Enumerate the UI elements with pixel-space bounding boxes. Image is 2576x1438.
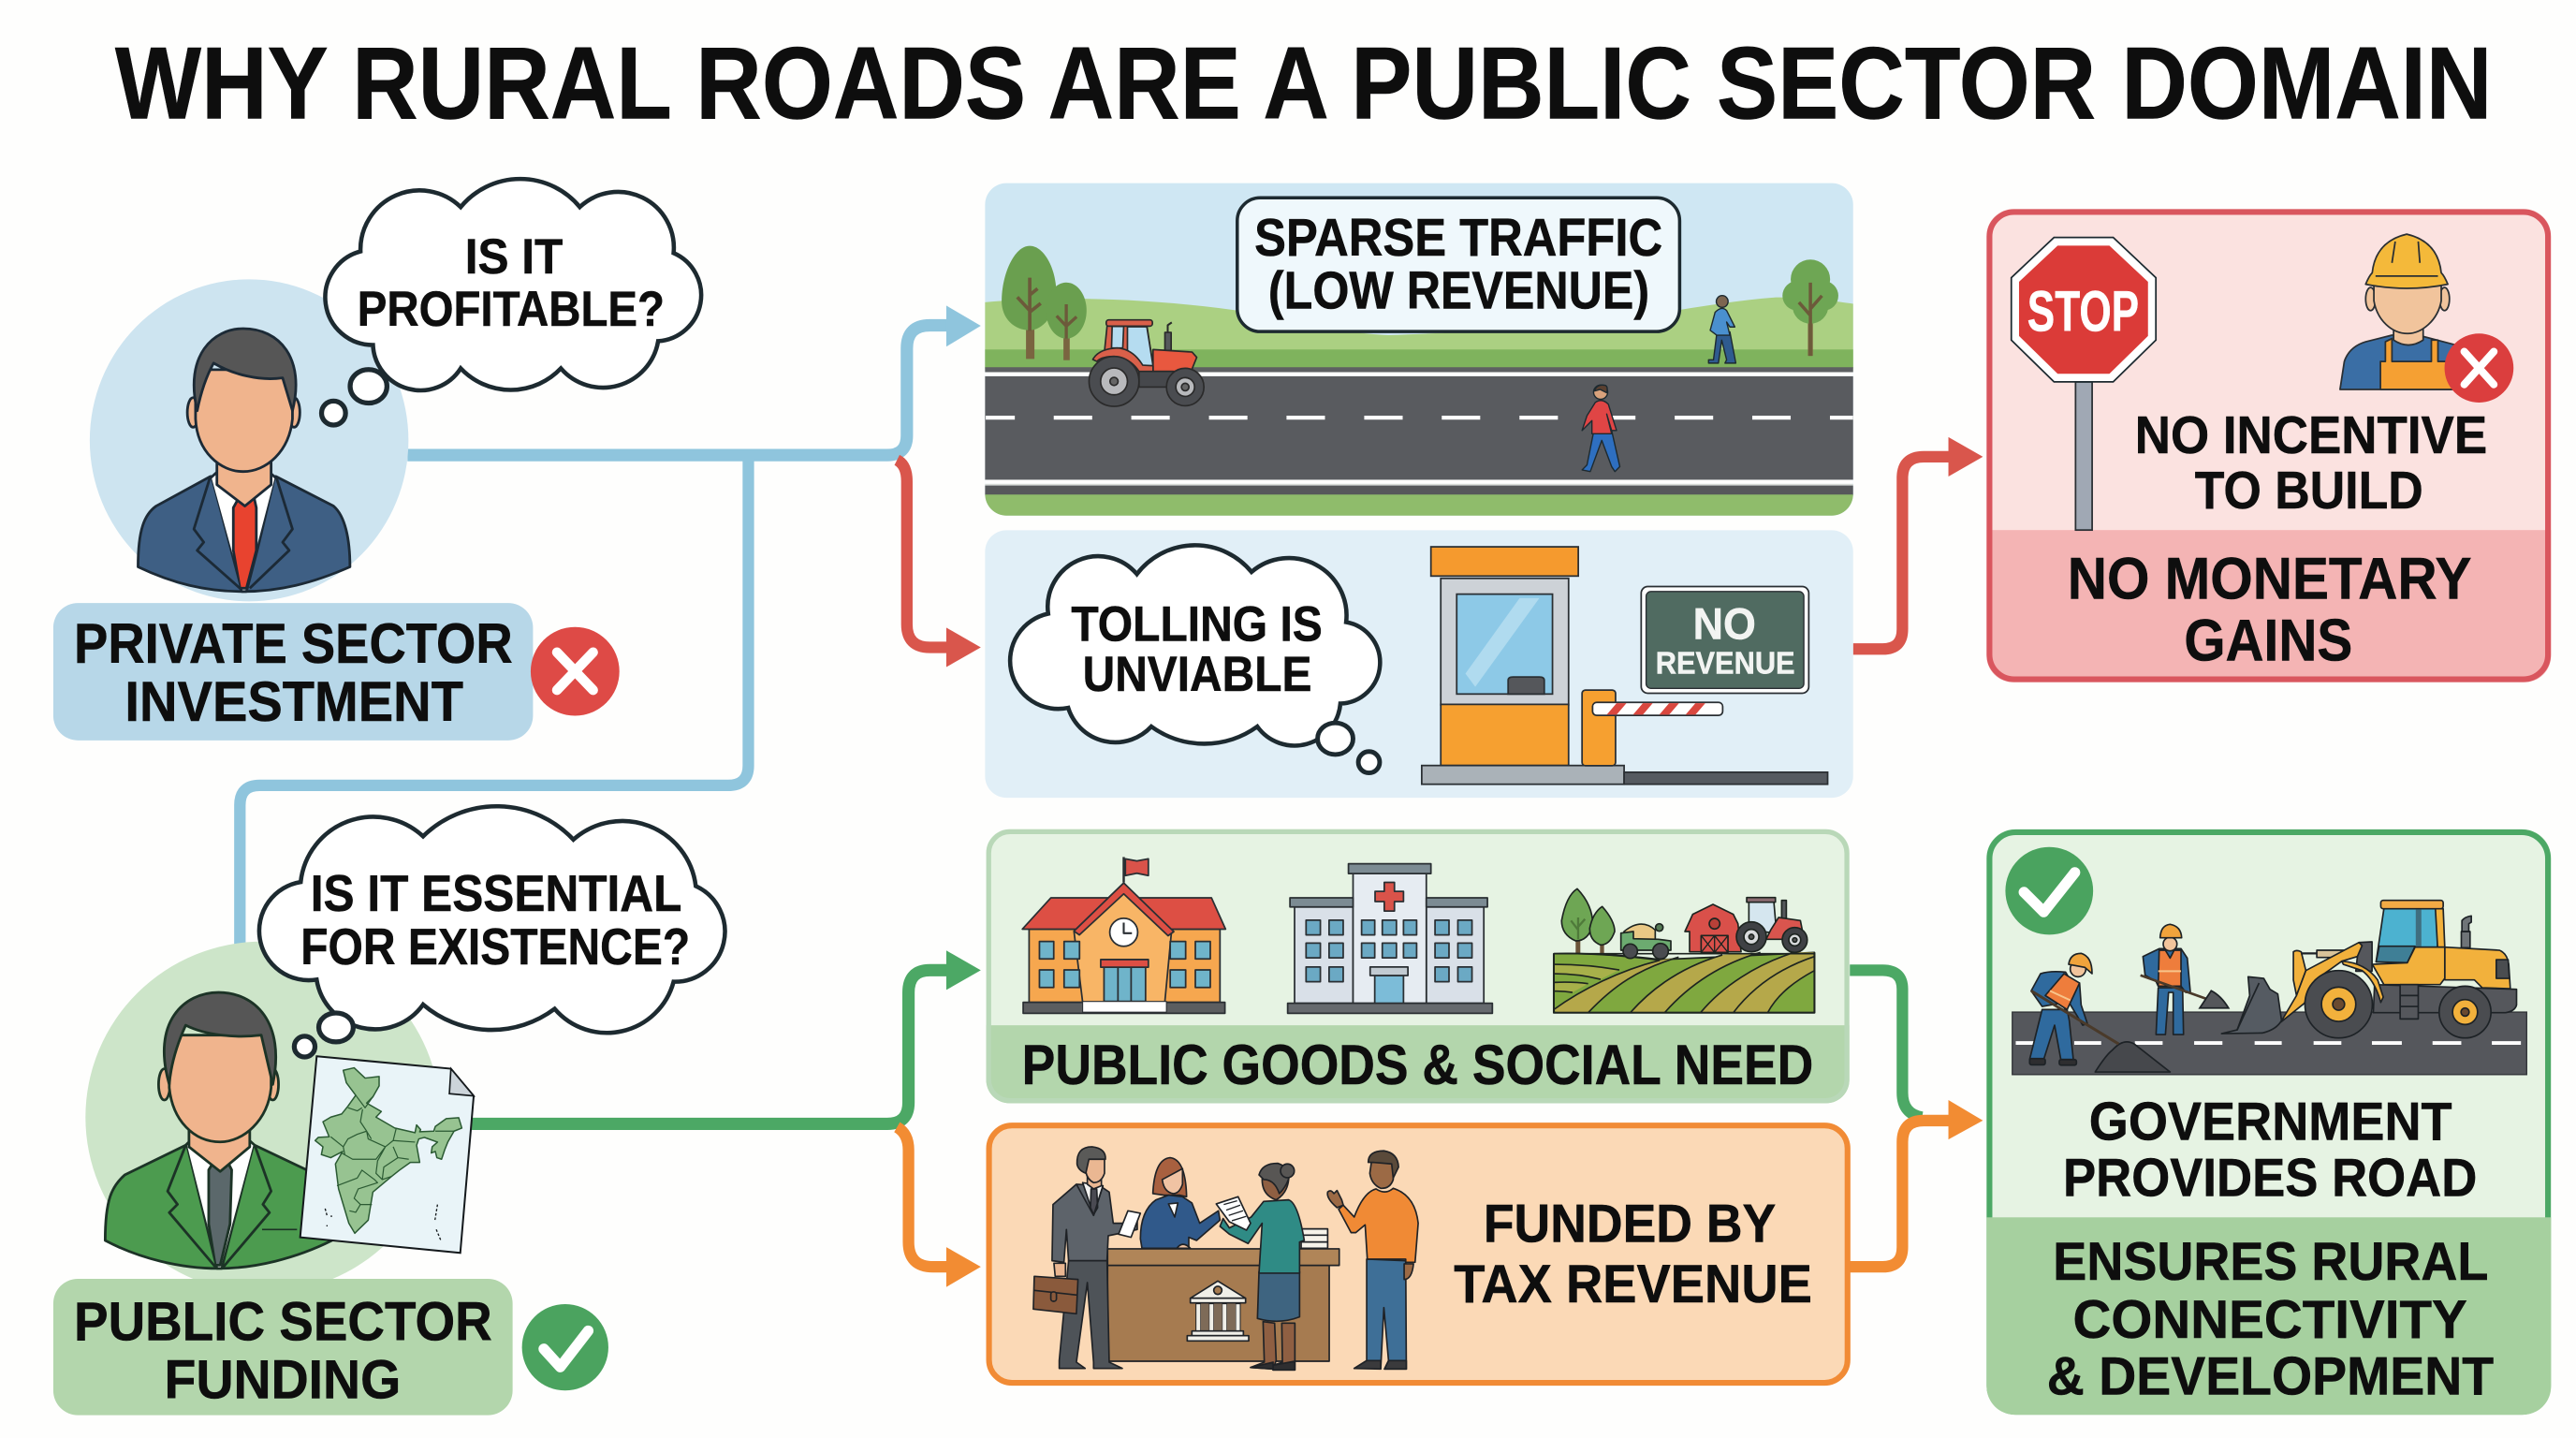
text: ensures rural connectivity and development [2047, 1232, 2494, 1407]
text: no monetary gains [2068, 546, 2471, 674]
text: ensures rural connectivity and development: ENSURES RURAL [2053, 1232, 2488, 1292]
icon: road workers [2029, 924, 2206, 1072]
icon: stop sign: STOP [2027, 280, 2139, 345]
text: no monetary gains: GAINS [2184, 609, 2352, 674]
icon: red cross [531, 627, 620, 715]
icon: desk with bank emblem [1107, 1229, 1339, 1361]
panel: no incentive to build [1986, 209, 2552, 683]
panel: sparse traffic road scene [984, 183, 1854, 518]
label: public sector funding [53, 1279, 513, 1416]
thought bubble: is it essential for existence: FOR EXISTENCE? [300, 918, 690, 976]
panel: tolling is unviable [985, 530, 1853, 798]
text: government provides road [2063, 1092, 2477, 1209]
icon: official in green suit [105, 992, 332, 1269]
sign: no revenue: REVENUE [1656, 647, 1795, 682]
thought bubble: tolling is unviable: UNVIABLE [1083, 647, 1311, 702]
icon: farm with barn and tractor [1554, 888, 1814, 1013]
callout: sparse traffic low revenue: (LOW REVENUE) [1268, 261, 1649, 320]
icon: man in orange sweater [1327, 1151, 1418, 1369]
arrow: public to public goods [468, 950, 981, 1123]
icon: walker on roadside [1708, 296, 1735, 363]
heading: public goods and social need: PUBLIC GOODS & SOCIAL NEED [1022, 1033, 1813, 1096]
label: private sector investment: PRIVATE SECTOR [74, 611, 513, 675]
illustration: people at tax desk [1033, 1147, 1418, 1370]
icon: green check [522, 1304, 608, 1390]
thought bubble: is it profitable: IS IT [465, 229, 563, 285]
callout: sparse traffic low revenue [1237, 198, 1679, 331]
text: no incentive to build [2135, 405, 2487, 520]
panel: public goods and social need [986, 829, 1850, 1104]
icon: construction worker with red cross [2340, 234, 2513, 403]
arrow: public goods to government provides [1850, 970, 1922, 1117]
icon: stop sign [2012, 238, 2156, 530]
label: private sector investment [53, 603, 533, 741]
public sector backdrop circle [85, 942, 440, 1293]
text: ensures rural connectivity and development: & DEVELOPMENT [2047, 1347, 2494, 1407]
label: private sector investment: INVESTMENT [124, 669, 463, 733]
sign: no revenue [1641, 587, 1808, 693]
thought bubble: tolling is unviable [1010, 545, 1380, 773]
arrow: private to tolling [897, 460, 981, 668]
label: public sector funding: FUNDING [165, 1350, 401, 1411]
text: no incentive to build: NO INCENTIVE [2135, 405, 2487, 464]
road surface [2012, 1012, 2526, 1075]
thought bubble: is it essential for existence [259, 806, 724, 1057]
icon: red tractor [1089, 320, 1204, 406]
thought bubble: tolling is unviable: TOLLING IS [1071, 596, 1323, 652]
thought bubble: is it essential for existence: IS IT ESSENTIAL [311, 865, 681, 922]
panel: private sector [53, 179, 701, 741]
panel: public sector [53, 806, 724, 1416]
icon: shovel blade [2200, 990, 2229, 1008]
arrow: public to tax revenue [897, 1127, 981, 1287]
icon: man in grey suit with briefcase [1033, 1147, 1140, 1369]
text: funded by tax revenue: TAX REVENUE [1454, 1255, 1812, 1314]
icon: pedestrian on road [1582, 385, 1620, 472]
text: no incentive to build: TO BUILD [2195, 461, 2423, 520]
text: funded by tax revenue [1454, 1195, 1812, 1314]
icon: seated woman in blue jacket [1140, 1158, 1220, 1248]
private sector backdrop circle [90, 279, 408, 601]
icon: toll barrier [1592, 702, 1722, 715]
arrow: tax revenue to government provides [1850, 1100, 1983, 1267]
sign: no revenue: NO [1693, 599, 1756, 649]
thought bubble: is it profitable: PROFITABLE? [358, 282, 665, 337]
icon: trees left [1002, 246, 1087, 360]
panel: government provides road [1986, 829, 2552, 1416]
icon: yellow wheel loader [2221, 901, 2516, 1038]
arrow: private sector to public sector connector [240, 455, 748, 953]
icon: school [1022, 857, 1225, 1013]
text: government provides road: GOVERNMENT [2089, 1092, 2452, 1152]
text: funded by tax revenue: FUNDED BY [1484, 1195, 1776, 1255]
panel: funded by tax revenue [989, 1125, 1848, 1383]
label: public sector funding: PUBLIC SECTOR [74, 1292, 492, 1353]
arrow: tolling to no monetary gains [1853, 437, 1983, 649]
icon: green check [2005, 847, 2093, 934]
icon: hospital [1288, 864, 1492, 1013]
icon: businessman in blue suit [138, 329, 350, 592]
icon: toll booth [1422, 547, 1828, 785]
icon: India map document [262, 1056, 474, 1253]
text: ensures rural connectivity and development: CONNECTIVITY [2073, 1290, 2467, 1350]
icon: woman in teal with document [1216, 1164, 1304, 1370]
thought bubble: is it profitable [322, 179, 701, 425]
text: no monetary gains: NO MONETARY [2068, 546, 2471, 611]
callout: sparse traffic low revenue: SPARSE TRAFFIC [1254, 208, 1662, 267]
icon: tree right [1782, 259, 1838, 356]
text: government provides road: PROVIDES ROAD [2063, 1149, 2477, 1209]
arrow: private to sparse traffic [407, 305, 981, 455]
